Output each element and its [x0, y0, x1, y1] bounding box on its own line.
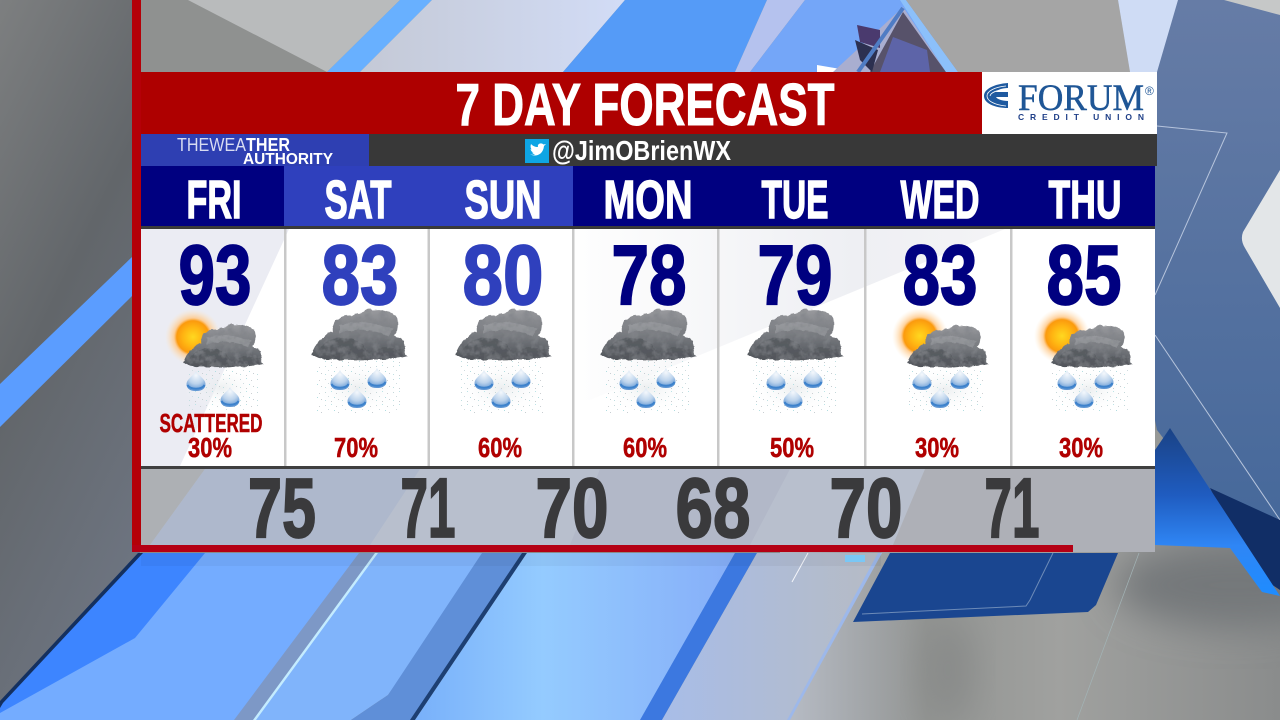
high temperatures: 83 [322, 228, 398, 322]
precipitation chances: 30% [915, 432, 959, 463]
low temperatures strip: 68 [676, 461, 750, 555]
icon: FRI sun, cloud, scattered rain [165, 309, 264, 410]
day header row: WED [900, 170, 980, 230]
precipitation chances: 70% [334, 432, 378, 463]
red frame [132, 0, 1073, 552]
heading bar: 7 day forecast [132, 72, 982, 138]
forecast cards background [141, 229, 1155, 466]
low temperatures strip: 71 [984, 461, 1040, 555]
day header row: TUE [762, 170, 828, 230]
logo: Forum Credit Union: ® [1145, 84, 1154, 98]
precipitation chances: 60% [478, 432, 522, 463]
high temperatures: 93 [178, 228, 252, 322]
high temperatures: 85 [1046, 228, 1122, 322]
icon: TUE storm cloud and rain [747, 310, 844, 415]
day header row: SUN [464, 170, 542, 230]
heading bar: 7 day forecast: 7 DAY FORECAST [456, 72, 834, 138]
logo: Forum Credit Union: CREDIT UNION [1018, 112, 1144, 122]
high temperatures: 83 [902, 228, 978, 322]
low temperatures strip: 70 [536, 461, 608, 555]
brand tab: The Weather Authority [141, 134, 369, 168]
icon: SUN storm cloud and rain [455, 310, 552, 415]
logo: Forum Credit Union [982, 72, 1157, 134]
brand tab: The Weather Authority: AUTHORITY [243, 151, 333, 168]
low temperatures strip [141, 461, 1155, 555]
day header row: FRI [186, 170, 242, 230]
precipitation chances [188, 432, 1103, 463]
high temperatures [178, 228, 1122, 322]
scattered note: SCATTERED [160, 408, 262, 438]
twitter handle: @JimOBrienWX [552, 135, 731, 166]
low temperatures strip: 70 [830, 461, 902, 555]
high temperatures: 80 [462, 228, 544, 322]
icon: THU sun, cloud, rain [1034, 308, 1133, 413]
low temperatures strip: 75 [248, 461, 316, 555]
day header row: MON [604, 170, 692, 230]
day header row [141, 166, 1155, 230]
precipitation chances: 60% [623, 432, 667, 463]
high temperatures: 78 [612, 228, 686, 322]
day header row: SAT [324, 170, 392, 230]
icon: twitter [525, 139, 549, 163]
panel: forecast board [132, 0, 1157, 555]
precipitation chances: 50% [770, 432, 814, 463]
low temperatures strip: 71 [400, 461, 456, 555]
social bar [369, 134, 1157, 166]
icon: MON storm cloud and rain [600, 310, 697, 415]
logo: Forum Credit Union: FORUM [1018, 78, 1144, 119]
precipitation chances: 30% [188, 432, 232, 463]
day header row: THU [1048, 170, 1122, 230]
brand tab: The Weather Authority: THEWEATHER [177, 135, 290, 155]
high temperatures: 79 [758, 228, 832, 322]
icon: WED sun, cloud, rain [892, 308, 989, 413]
precipitation chances: 30% [1059, 432, 1103, 463]
icon: SAT storm cloud and rain [311, 310, 408, 415]
